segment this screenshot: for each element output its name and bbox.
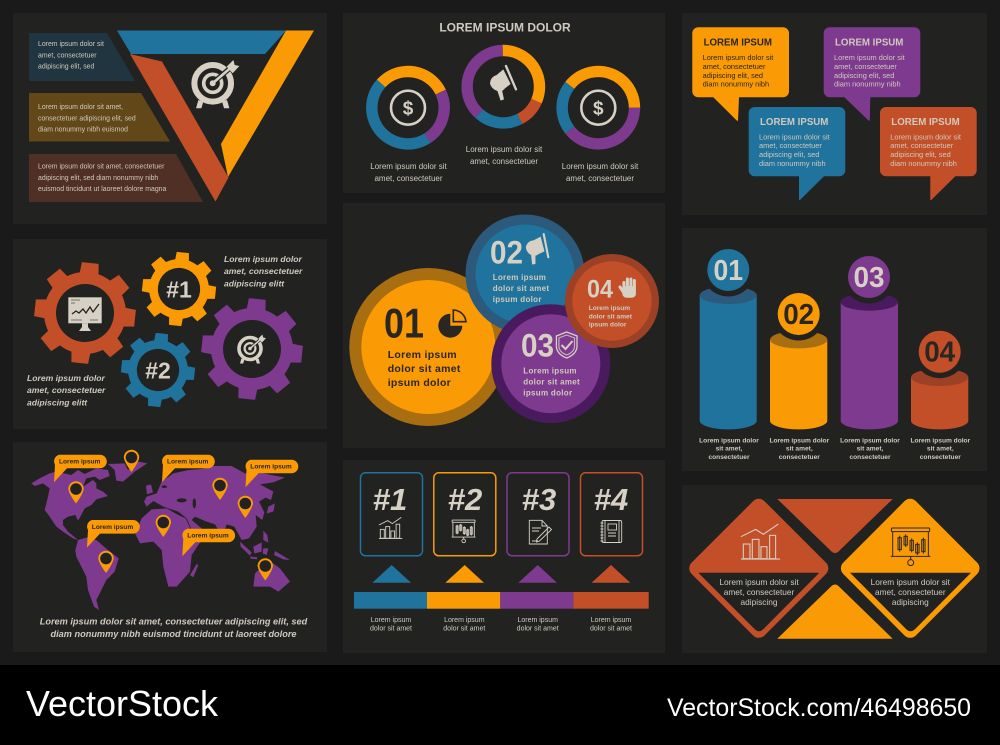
circle 03: Lorem ipsum (523, 366, 577, 375)
text: map caption: diam nonummy nibh euismod tincidunt ut laoreet dolore (50, 629, 297, 639)
icon: shield (556, 332, 577, 358)
icon: chart (741, 524, 780, 559)
captions: timeline: Lorem ipsum (591, 617, 631, 624)
arrows: triangles (372, 565, 630, 583)
circle 02: dolor sit amet (493, 284, 549, 293)
panel: world map (13, 442, 327, 652)
captions: cylinders: sit amet, (786, 446, 813, 453)
map callouts: Lorem ipsum (167, 459, 209, 466)
icon: dollar left: $ (403, 98, 414, 120)
bubble: orange: LOREM IPSUM (704, 38, 772, 49)
map callouts: Lorem ipsum (187, 533, 229, 540)
cylinder 01 (700, 244, 757, 429)
card 4: #4 (594, 482, 628, 517)
captions: timeline: dolor sit amet (590, 626, 632, 632)
text box: brown: Lorem ipsum dolor sit amet, consectetuer (38, 164, 165, 170)
map: americas (31, 462, 147, 610)
circle 03: ipsum dolor (523, 388, 572, 397)
bubble: red: diam nonummy nibh (890, 159, 957, 168)
gear: blue #2 (118, 330, 198, 410)
gear: orange #1 (139, 249, 219, 329)
captions: cylinders: Lorem ipsum dolor (699, 438, 759, 444)
bubble: blue: adipiscing elit, sed (759, 150, 819, 159)
circle 01 content: Lorem ipsum (388, 349, 457, 361)
heading: LOREM IPSUM DOLOR (439, 20, 571, 34)
bubble: orange: Lorem ipsum dolor sit (703, 53, 773, 62)
panel: speech bubbles (682, 13, 987, 215)
text: gears upper (224, 254, 303, 288)
diamond: orange: amet, consectetuer (875, 587, 946, 597)
circle 02: ipsum dolor (493, 295, 542, 304)
icon: dollar right (581, 91, 615, 125)
text box: amber: diam nonummy nibh euismod (38, 127, 128, 134)
cylinder 03: 03 (854, 262, 884, 294)
icon: presentation board (452, 520, 476, 543)
captions: cylinders (699, 438, 971, 461)
panel: cylinders (682, 228, 987, 471)
icon: target (194, 60, 239, 108)
circle 02: 02 (490, 234, 523, 270)
card 4 (580, 473, 642, 556)
map callouts: Lorem ipsum (59, 459, 101, 466)
circle 01 (349, 268, 507, 426)
captions: donuts: Lorem ipsum dolor sit (466, 145, 543, 154)
text: gears upper: amet, consectetuer (224, 266, 303, 276)
icon: notebook (600, 520, 622, 542)
captions: cylinders: consectetuer (779, 454, 820, 461)
panel: bubble circles (343, 203, 665, 448)
text: map caption: Lorem ipsum dolor sit amet, consectetuer adipiscing elit, sed (40, 616, 308, 626)
text box: blue: amet, consectetuer (38, 52, 97, 59)
footer band (0, 665, 1000, 745)
diamond: red: amet, consectetuer (724, 587, 795, 597)
cylinder 04 (911, 325, 968, 429)
captions: cylinders: Lorem ipsum dolor (769, 438, 830, 444)
bubble: blue: LOREM IPSUM (760, 117, 828, 128)
captions: timeline: dolor sit amet (443, 626, 485, 632)
icon: dollar right: $ (593, 98, 604, 120)
captions: cylinders: consectetuer (708, 454, 750, 461)
diamond: orange: adipiscing (892, 597, 929, 607)
icon: megaphone (522, 231, 553, 268)
donut: right (547, 57, 649, 159)
cylinder 01: 01 (714, 255, 743, 287)
icon: board (891, 528, 930, 566)
captions: timeline (370, 617, 632, 632)
text box: amber: Lorem ipsum dolor sit amet, (38, 104, 123, 111)
circle 04: 04 (587, 275, 613, 303)
bubble: purple: LOREM IPSUM (835, 38, 903, 49)
circle 04: dolor sit amet (589, 313, 633, 320)
captions: cylinders: sit amet, (716, 446, 743, 453)
captions: donuts: amet, consectetuer (374, 174, 443, 183)
circle 04: Lorem ipsum (589, 305, 630, 312)
cylinder 02 (770, 288, 827, 429)
text box: blue: Lorem ipsum dolor sit (38, 41, 104, 48)
bubble: blue: diam nonummy nibh (759, 159, 826, 168)
panel: donuts (343, 13, 665, 193)
footer: image id: VectorStock.com/46498650 (667, 695, 971, 722)
captions: cylinders: consectetuer (849, 454, 891, 461)
captions: timeline: dolor sit amet (517, 626, 559, 632)
icon: megaphone center (490, 66, 516, 101)
panel: diamonds (682, 485, 987, 653)
bubble: blue (749, 107, 845, 200)
captions: cylinders: consectetuer (920, 454, 961, 461)
text box: blue: adipiscing elit, sed (38, 64, 94, 71)
triangle: red side (130, 54, 228, 202)
icon: monitor (68, 297, 102, 331)
footer: brand: VectorStock (26, 683, 219, 724)
bubble: blue: Lorem ipsum dolor sit (759, 132, 830, 141)
card 1 (360, 473, 422, 556)
bubble: red: adipiscing elit, sed (890, 150, 951, 159)
captions: cylinders: Lorem ipsum dolor (840, 438, 900, 444)
timeline bar (354, 592, 649, 609)
cylinder 04: 04 (924, 337, 955, 369)
cylinder 03 (841, 250, 898, 429)
bubble: orange (692, 27, 789, 121)
gear: blue #2: #2 (145, 358, 171, 384)
diamond: red (697, 507, 820, 631)
bubble: orange: diam nonummy nibh (703, 80, 769, 89)
text box: blue (29, 33, 135, 81)
circle 01 content: 01 (384, 300, 424, 347)
bubble: red: amet, consectetuer (890, 141, 954, 150)
card 3: #3 (522, 482, 556, 517)
circle 02 (466, 214, 584, 334)
circle 04: ipsum dolor (589, 322, 627, 329)
text: gears upper: Lorem ipsum dolor (224, 254, 302, 264)
text box: amber: consectetuer adipiscing elit, sed (38, 115, 136, 122)
captions: donuts (370, 145, 639, 183)
diamond: red: Lorem ipsum dolor sit (719, 577, 799, 587)
bubble: orange: amet, consectetuer (703, 62, 766, 71)
card 2 (434, 473, 496, 556)
donut: center (452, 36, 554, 138)
gear: red monitor (30, 258, 140, 368)
icon: bar chart (379, 517, 402, 538)
text: gears lower: adipiscing elitt (27, 398, 88, 408)
panel: triangle goals (13, 13, 327, 224)
captions: timeline: Lorem ipsum (517, 617, 558, 624)
bubble: red: LOREM IPSUM (891, 117, 960, 128)
captions: timeline: Lorem ipsum (444, 617, 485, 624)
bubble: orange: adipiscing elit, sed (703, 71, 763, 80)
captions: cylinders: sit amet, (927, 446, 954, 453)
panel: numbered cards (343, 460, 665, 653)
text box: brown: adipiscing elit, sed diam nonummy nibh (38, 175, 158, 182)
captions: cylinders: sit amet, (857, 446, 884, 453)
icon: hand (620, 278, 636, 298)
text: gears lower (27, 373, 106, 408)
map pins (68, 450, 273, 580)
circle 03 (491, 304, 610, 423)
diamond: orange: Lorem ipsum dolor sit (871, 577, 951, 587)
bubble: purple: diam nonummy nibh (834, 80, 901, 89)
icon: pie (438, 310, 466, 338)
diamond: red: adipiscing (741, 597, 778, 607)
bubble: purple (824, 27, 920, 121)
bubble: purple: amet, consectetuer (834, 62, 897, 71)
gear: orange #1: #1 (166, 276, 192, 302)
circle 04 (565, 254, 659, 348)
circle 03: dolor sit amet (523, 377, 580, 386)
gear: purple target (197, 294, 307, 404)
map callouts: Lorem ipsum (250, 464, 292, 471)
icon: target small (239, 334, 266, 364)
text box: brown: euismod tincidunt ut laoreet dolore magna (38, 186, 166, 193)
text box: amber (29, 93, 170, 142)
captions: donuts: amet, consectetuer (566, 174, 634, 183)
text: map caption (40, 616, 308, 639)
diamond: orange (849, 507, 972, 631)
circle 01 content: ipsum dolor (388, 377, 451, 389)
bubble: blue: amet, consectetuer (759, 141, 822, 150)
map callouts (54, 455, 298, 556)
captions: cylinders: Lorem ipsum dolor (910, 438, 971, 444)
cylinder 02: 02 (783, 299, 814, 331)
text: gears lower: Lorem ipsum dolor (27, 373, 105, 383)
circle 01 content (384, 300, 466, 389)
triangle: blue side (117, 30, 286, 54)
captions: donuts: Lorem ipsum dolor sit (370, 162, 448, 171)
donut: left (357, 57, 459, 159)
circle 01 content: dolor sit amet (388, 363, 461, 375)
icon: dollar left (391, 91, 425, 125)
triangle: orange side (221, 30, 314, 177)
map callouts: Lorem ipsum (92, 524, 133, 531)
text: gears lower: amet, consectetuer (27, 385, 106, 395)
text box: brown (29, 154, 203, 202)
panel: gears (13, 239, 327, 429)
circle 03: 03 (521, 328, 554, 364)
bubble: purple: adipiscing elit, sed (834, 71, 894, 80)
triangle: top red (777, 499, 893, 553)
captions: timeline: Lorem ipsum (371, 617, 411, 624)
captions: donuts: amet, consectetuer (470, 157, 538, 166)
card 2: #2 (448, 482, 482, 517)
card 1: #1 (373, 482, 407, 517)
triangle: bottom orange (777, 584, 893, 639)
bubble: red: Lorem ipsum dolor sit (890, 132, 961, 141)
text: gears upper: adipiscing elitt (224, 278, 285, 288)
bubble: red (880, 107, 977, 200)
bubble: purple: Lorem ipsum dolor sit (834, 53, 905, 62)
captions: timeline: dolor sit amet (370, 626, 412, 632)
circle 02: Lorem ipsum (493, 273, 546, 282)
captions: donuts: Lorem ipsum dolor sit (562, 162, 639, 171)
card 3 (507, 473, 569, 556)
map: eurasia africa australia (135, 466, 290, 592)
icon: document (529, 520, 552, 544)
